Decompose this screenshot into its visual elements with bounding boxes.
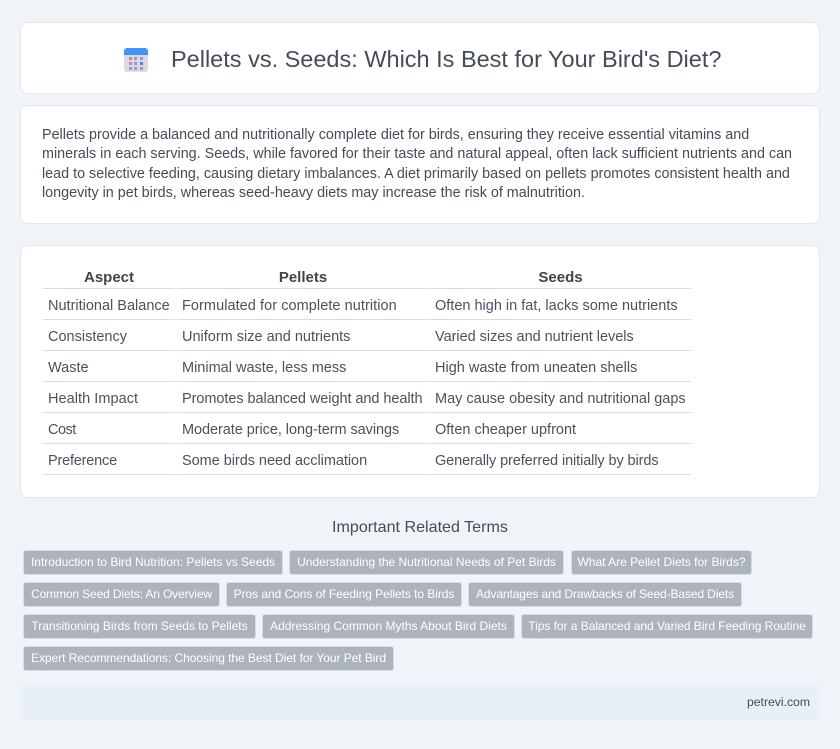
tag xyxy=(289,550,564,575)
tag list xyxy=(23,550,813,671)
tag: Pros and Cons of Feeding Pellets to Birds xyxy=(234,587,454,601)
row: Cost: Cost xyxy=(48,422,76,438)
tag: Advantages and Drawbacks of Seed-Based Diets xyxy=(476,587,734,601)
row: Cost seeds: Often cheaper upfront xyxy=(435,422,576,438)
panel: comparison table xyxy=(20,245,820,498)
row: Waste: Waste xyxy=(48,360,89,376)
row: Nutritional Balance: Nutritional Balance xyxy=(48,298,170,314)
tag: Introduction to Bird Nutrition: Pellets vs Seeds xyxy=(31,555,275,569)
row: Nutritional Balance pellets: Formulated for complete nutrition xyxy=(182,298,397,314)
table header: Pellets: Pellets xyxy=(279,269,327,286)
tag xyxy=(23,550,283,575)
row: Preference pellets: Some birds need acclimation xyxy=(182,453,367,469)
panel: introduction xyxy=(20,105,820,224)
title: Pellets vs. Seeds: Which Is Best for Your Bird's Diet? xyxy=(171,46,721,72)
intro line 3: lead to selective feeding, causing dietary imbalances. A diet primarily based on pellets promotes consistent health and xyxy=(42,166,790,182)
footer source: petrevi.com xyxy=(747,695,810,709)
row: Cost pellets: Moderate price, long-term savings xyxy=(182,422,399,438)
row: Health Impact seeds: May cause obesity and nutritional gaps xyxy=(435,391,686,407)
icon: calendar xyxy=(124,48,148,72)
heading: related terms: Important Related Terms xyxy=(332,518,508,536)
tag xyxy=(23,646,394,671)
tag: What Are Pellet Diets for Birds? xyxy=(577,555,746,569)
intro line 2: minerals in each serving. Seeds, while favored for their taste and natural appeal, often lack sufficient nutrients and can xyxy=(42,146,792,162)
tag: Tips for a Balanced and Varied Bird Feeding Routine xyxy=(528,619,806,633)
tag xyxy=(23,614,256,639)
row: Preference seeds: Generally preferred initially by birds xyxy=(435,453,658,469)
tag xyxy=(571,550,752,575)
tag xyxy=(521,614,813,639)
row: Preference: Preference xyxy=(48,453,117,469)
tag: Understanding the Nutritional Needs of Pet Birds xyxy=(297,555,556,569)
row: Waste seeds: High waste from uneaten shells xyxy=(435,360,637,376)
tag: Addressing Common Myths About Bird Diets xyxy=(270,619,507,633)
tag xyxy=(226,582,462,607)
table header: Seeds: Seeds xyxy=(538,269,583,286)
row: Consistency seeds: Varied sizes and nutrient levels xyxy=(435,329,634,345)
row: Consistency: Consistency xyxy=(48,329,127,345)
intro line 1: Pellets provide a balanced and nutritionally complete diet for birds, ensuring they receive essential vitamins and xyxy=(42,127,749,143)
tag xyxy=(262,614,515,639)
intro line 4: longevity in pet birds, whereas seed-heavy diets may increase the risk of malnutrition. xyxy=(42,185,585,201)
table header: Aspect: Aspect xyxy=(84,269,134,286)
footer bar xyxy=(20,685,820,719)
row: Health Impact: Health Impact xyxy=(48,391,138,407)
header panel xyxy=(20,22,820,94)
tag: Transitioning Birds from Seeds to Pellets xyxy=(31,619,248,633)
tag: Common Seed Diets: An Overview xyxy=(31,587,212,601)
tag xyxy=(468,582,742,607)
row: Waste pellets: Minimal waste, less mess xyxy=(182,360,346,376)
row: Health Impact pellets: Promotes balanced weight and health xyxy=(182,391,423,407)
row: Consistency pellets: Uniform size and nutrients xyxy=(182,329,350,345)
row: Nutritional Balance seeds: Often high in fat, lacks some nutrients xyxy=(435,298,678,314)
tag: Expert Recommendations: Choosing the Best Diet for Your Pet Bird xyxy=(31,651,386,665)
tag xyxy=(23,582,220,607)
